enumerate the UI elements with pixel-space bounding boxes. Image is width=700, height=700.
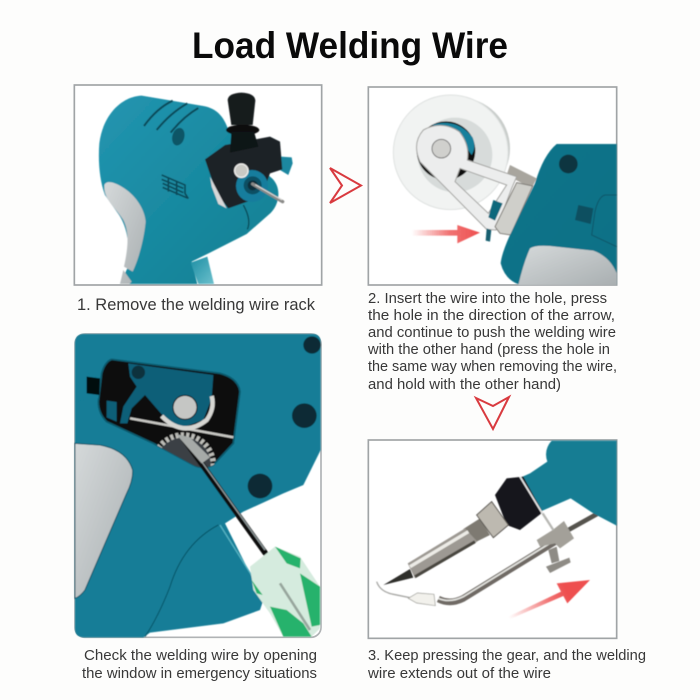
icon: window outline and logo [592,195,617,247]
icon: body logo [162,175,188,199]
arrow: right chevron [330,168,361,203]
icon: white sleeve [408,593,435,606]
icon: gray grip [75,443,133,598]
icon: gun body [501,144,617,285]
icon: metal bracket [507,165,537,188]
icon: left wire channel [75,373,100,402]
icon: red arrow [412,225,480,243]
icon: body seam [243,205,249,229]
icon: upper tube [568,512,600,530]
icon: casing screws [248,336,321,498]
icon: silver plate [495,183,533,235]
icon: gear [156,432,217,468]
panel: wire extends photo [368,440,617,638]
icon: black collar [495,477,543,530]
text: step 2 caption: the same way when removing the wire, [368,358,617,375]
icon: trigger seam [145,525,218,637]
icon: center bolt [173,395,197,419]
icon: window opening [98,359,240,467]
icon: blade [130,418,233,437]
icon: red arrow [508,580,590,619]
icon: spool bolt [432,139,451,158]
title: Load Welding Wire [192,25,508,66]
icon: wire [253,184,283,202]
icon: gray grip [518,246,617,285]
text: emergency caption: the window in emergency situations [82,665,317,682]
icon: solder wire [377,582,410,598]
icon: teal gun nose [523,441,617,526]
icon: blue wire ring [236,170,268,202]
text: step 2 caption [367,290,617,393]
text: step 3 caption [367,647,646,682]
text: step 2 caption: with the other hand (press the hole in [367,341,610,358]
panel: remove wire rack photo [74,85,322,285]
text: emergency caption: Check the welding wire by opening [84,647,317,664]
icon: teal lever tab [488,200,503,221]
icon: silver ring [477,502,508,538]
icon: clamp knob [546,547,571,573]
text: step 2 caption: and hold with the other hand) [368,376,561,393]
text: step 2 caption: and continue to push the welding wire [368,324,616,341]
icon: solder tip [383,569,413,585]
icon: rack knob [226,93,259,153]
icon: body screw [559,155,578,173]
icon: side hole [170,126,186,147]
text: step 3 caption: 3. Keep pressing the gear, and the welding [368,647,646,664]
text: step 2 caption: the hole in the direction of the arrow, [368,307,615,324]
icon: gun body [75,334,321,637]
text: step 1 caption: 1. Remove the welding wire rack [77,295,315,314]
icon: rack screw [235,164,248,177]
icon: blue tab [280,157,293,175]
icon: black wire rack block [205,137,282,208]
icon: teal gun body [99,96,278,284]
icon: lower wire tube [438,537,563,602]
icon: metal arm [417,125,517,230]
icon: screwdriver shaft [176,434,267,555]
icon: lower handle [191,257,214,284]
text: emergency caption [82,647,317,682]
icon: barrel neck [463,518,490,542]
icon: internal lever [120,363,213,427]
text: step 2 caption: 2. Insert the wire into the hole, press [368,290,607,307]
text: step 3 caption: wire extends out of the wire [367,665,551,682]
icon: silver crescent [162,396,213,428]
icon: barrel [408,528,477,578]
icon: vent slots [144,101,198,133]
icon: wire spool [393,95,510,210]
icon: green screwdriver handle [250,547,320,637]
arrow: down chevron [476,397,509,429]
icon: wire end [486,228,491,242]
panel: emergency window photo [75,334,321,637]
panel: insert wire photo [368,87,617,285]
icon: wire clamp [537,521,574,548]
icon: gray grip [104,182,146,284]
